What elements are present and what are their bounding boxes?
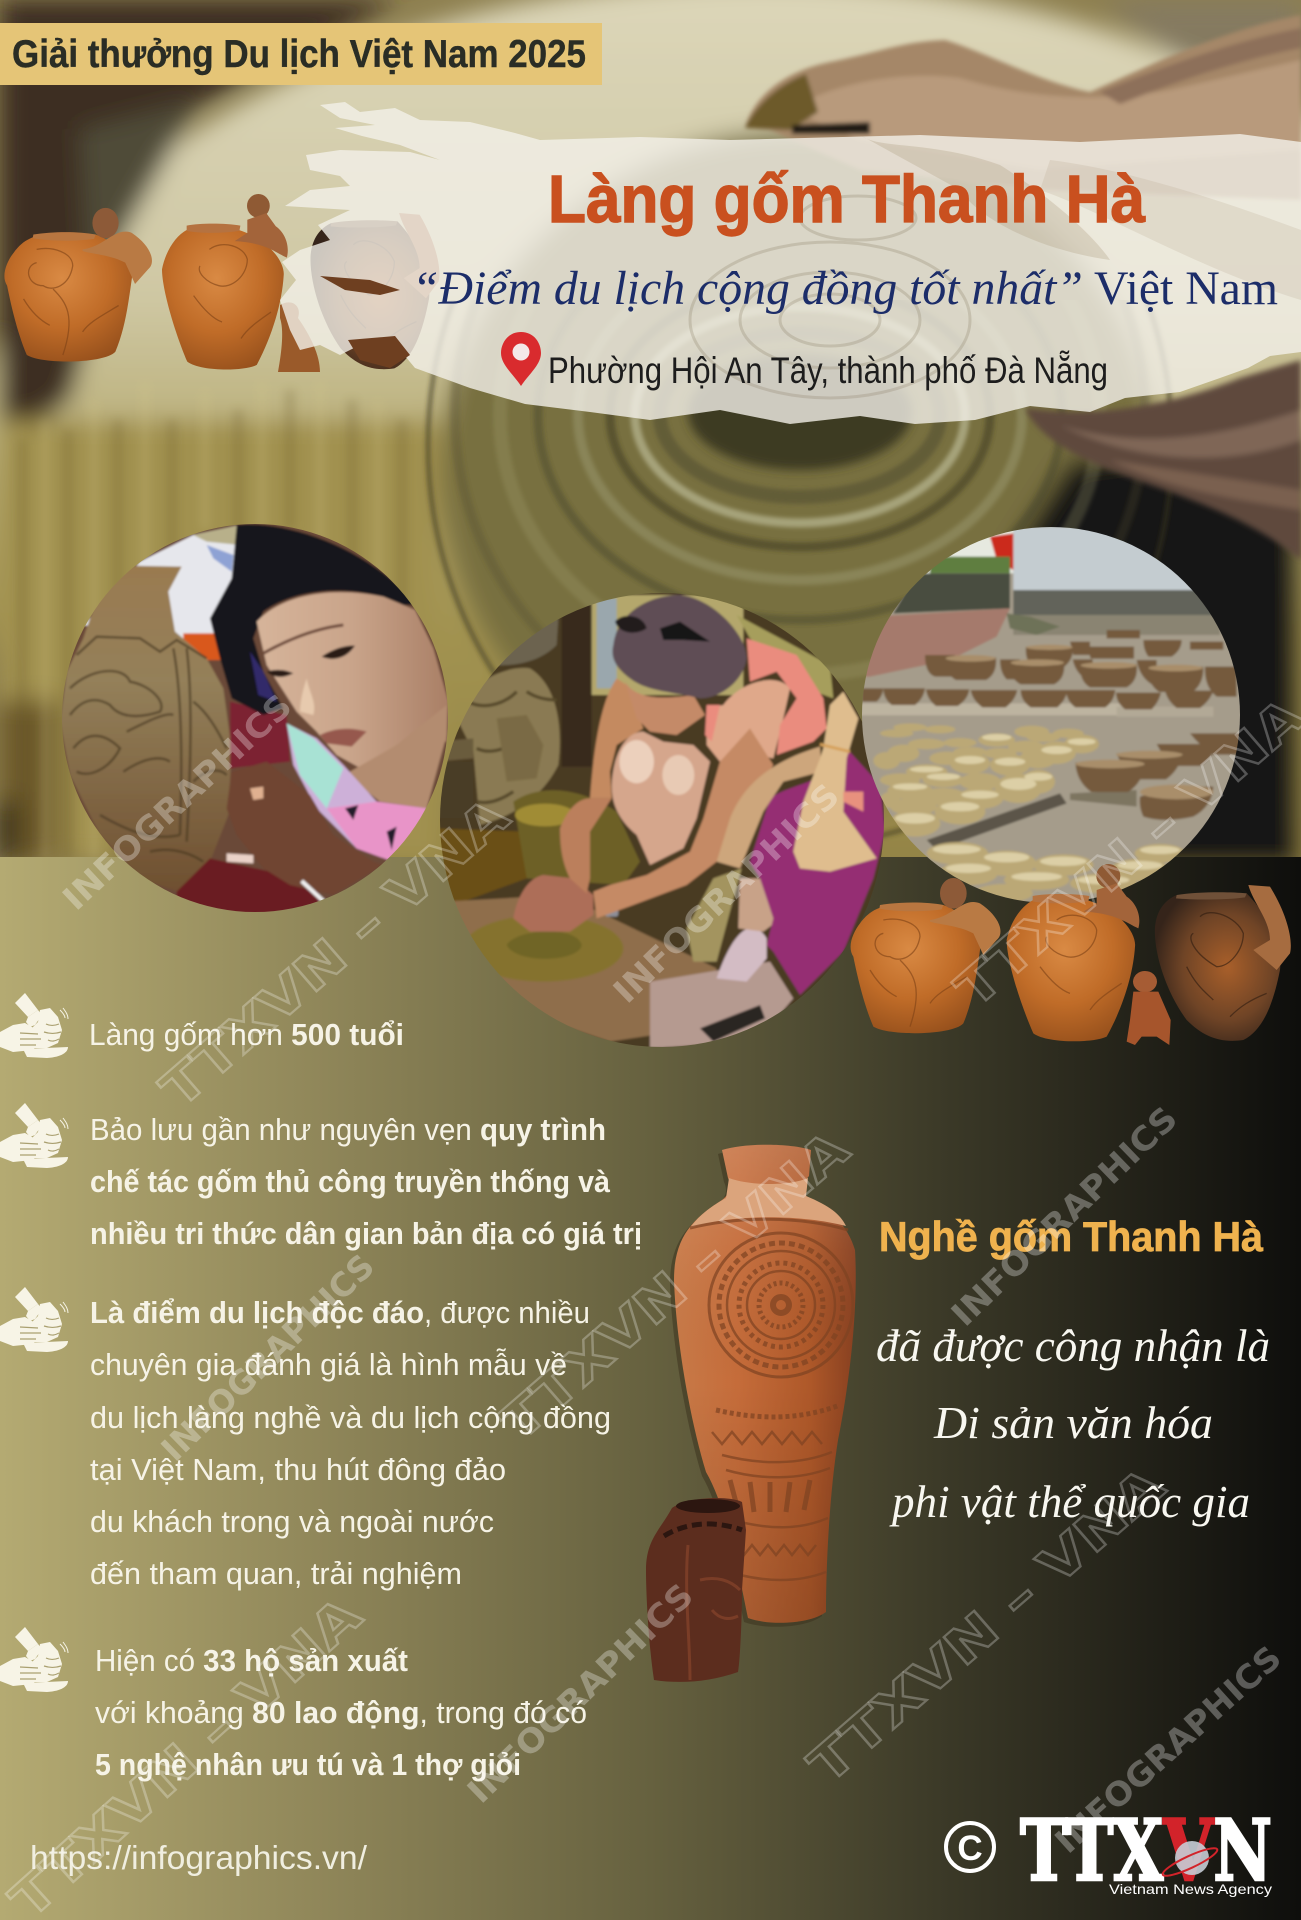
text: preserved craft: Bảo lưu gần như nguyên vẹn quy trình (90, 1112, 606, 1147)
text: unique destination: chuyên gia đánh giá là hình mẫu về (90, 1347, 567, 1382)
watermarks (0, 686, 1301, 1920)
text: preserved craft: nhiều tri thức dân gian bản địa có giá trị (90, 1216, 642, 1251)
photo circle: woman at potter's wheel (430, 585, 900, 1055)
icon: hand shaping pot 4 (0, 1627, 68, 1692)
vase: large terracotta (670, 1145, 856, 1627)
icon: copyright (946, 1823, 994, 1871)
hand: potter lower right (1025, 360, 1301, 560)
location text: Phường Hội An Tây, thành phố Đà Nẵng (548, 350, 1108, 391)
text: households and workers: với khoảng 80 lao động, trong đó có (95, 1695, 587, 1730)
text: unique destination: du khách trong và ngoài nước (90, 1504, 494, 1539)
watermarks: TTXVN – VNA (490, 1119, 860, 1452)
text: heritage recognition: đã được công nhận là (876, 1320, 1270, 1371)
heading: heritage: Nghề gốm Thanh Hà (879, 1213, 1264, 1260)
text: village age: Làng gốm hơn 500 tuổi (89, 1017, 404, 1052)
icon: hand shaping pot 1 (0, 993, 68, 1058)
text: preserved craft: chế tác gốm thủ công truyền thống và (90, 1164, 611, 1199)
watermarks: INFOGRAPHICS (1047, 1638, 1289, 1861)
lower gradient panel (0, 857, 1301, 1920)
icon: hand shaping pot 3 (0, 1287, 68, 1352)
text: unique destination: Là điểm du lịch độc đáo, được nhiều (90, 1295, 590, 1330)
subtitle: “Điểm du lịch cộng đồng tốt nhất” Việt Nam (412, 262, 1278, 315)
text: unique destination (90, 1295, 611, 1591)
icon: small monkey figurine (1127, 971, 1171, 1045)
photo circle: drying pots in yard (862, 527, 1240, 902)
watermarks: TTXVN – VNA (945, 686, 1301, 1019)
watermarks: TTXVN – VNA (150, 786, 520, 1119)
icon: location pin (501, 332, 541, 386)
watermarks: INFOGRAPHICS (605, 776, 847, 1011)
top label: award name (0, 23, 602, 85)
background: pottery wheel photo (0, 0, 1301, 857)
icon: copyright: C (957, 1829, 983, 1868)
pottery jars under banner (4, 194, 439, 372)
watermarks: INFOGRAPHICS (153, 1246, 382, 1469)
text: households and workers: 5 nghệ nhân ưu tú và 1 thợ giỏi (95, 1747, 521, 1782)
text: households and workers (95, 1643, 587, 1782)
logo: TTXVN: TTXVN (1020, 1801, 1272, 1900)
watermarks: INFOGRAPHICS (459, 1576, 701, 1811)
top label: award name: Giải thưởng Du lịch Việt Nam 2025 (12, 33, 586, 76)
hand: potter upper right (745, 15, 1301, 200)
photo circle: girl carving vase (62, 524, 448, 912)
text: heritage recognition (876, 1320, 1270, 1527)
pottery jars row (851, 864, 1291, 1045)
source url: https://infographics.vn/ (30, 1839, 368, 1876)
text: unique destination: du lịch làng nghề và du lịch cộng đồng (90, 1400, 611, 1435)
logo: TTXVN: Vietnam News Agency (1109, 1881, 1272, 1897)
text: unique destination: tại Việt Nam, thu hút đông đảo (90, 1452, 506, 1487)
text: heritage recognition: Di sản văn hóa (933, 1397, 1213, 1448)
banner: torn white paper (280, 102, 1301, 424)
watermarks: TTXVN – VNA (798, 1456, 1176, 1795)
text: households and workers: Hiện có 33 hộ sản xuất (95, 1643, 408, 1678)
text: heritage recognition: phi vật thể quốc gia (889, 1476, 1250, 1527)
watermarks: INFOGRAPHICS (943, 1099, 1185, 1334)
text: unique destination: đến tham quan, trải nghiệm (90, 1556, 462, 1591)
title: Làng gốm Thanh Hà (548, 162, 1146, 237)
text: preserved craft (90, 1112, 642, 1251)
vase: small dark face (646, 1498, 746, 1682)
icon: hand shaping pot 2 (0, 1103, 68, 1168)
watermarks: INFOGRAPHICS (55, 686, 299, 918)
